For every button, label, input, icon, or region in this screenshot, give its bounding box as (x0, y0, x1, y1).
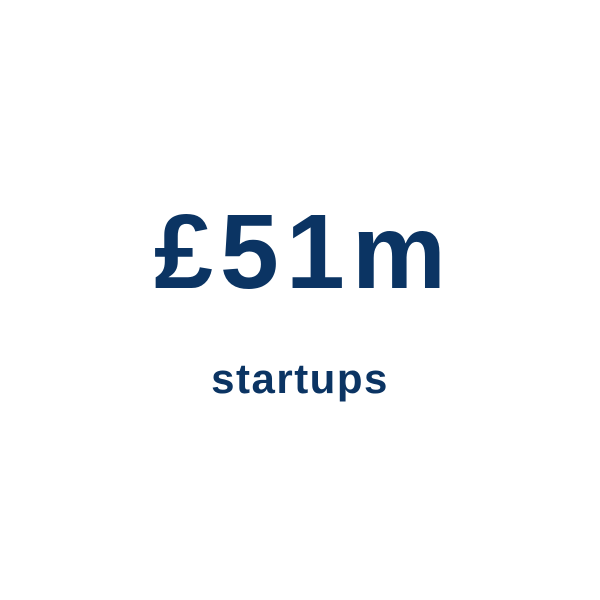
label: startups (211, 355, 389, 402)
headline figure: £51m (154, 193, 453, 311)
